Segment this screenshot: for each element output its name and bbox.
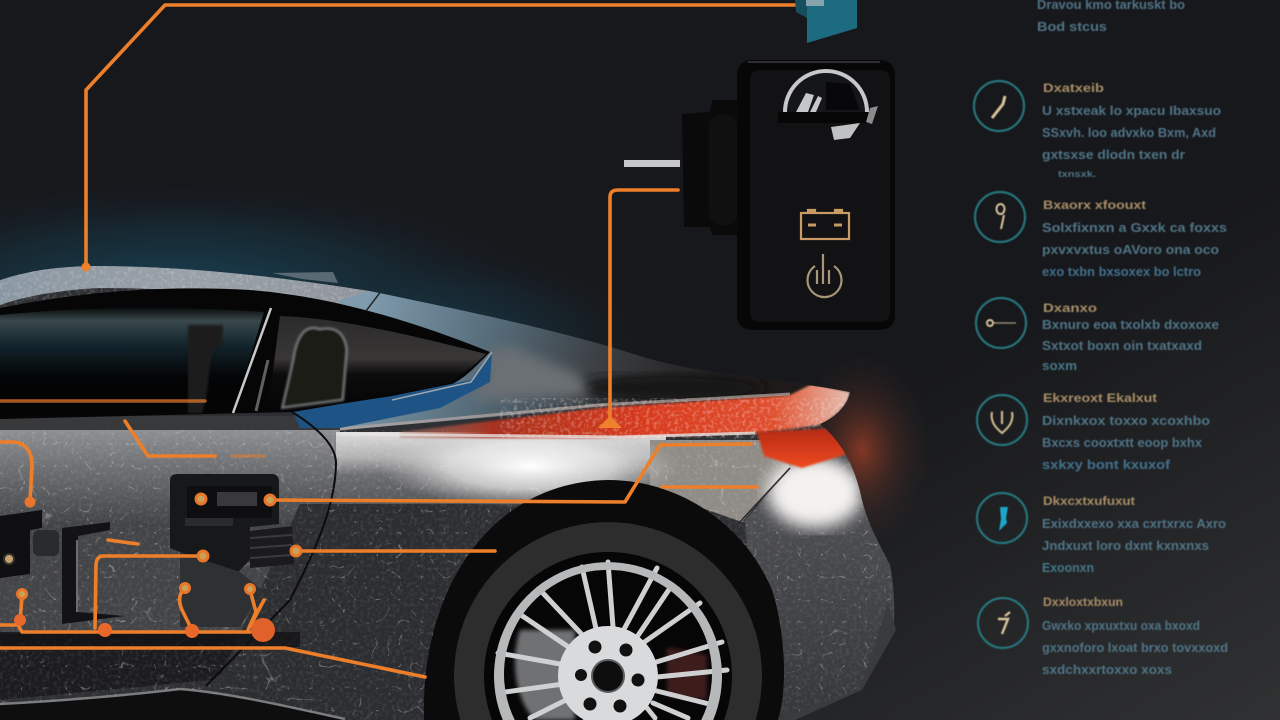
list item 4 (977, 391, 1210, 472)
plug housing (682, 100, 738, 235)
list item 4: Bxcxs cooxtxtt eoop bxhx (1042, 436, 1202, 450)
list item 6 (978, 595, 1228, 677)
wheel arch (424, 480, 784, 720)
upper door wire (125, 421, 215, 456)
dark shoulder (575, 374, 765, 402)
sill wire (0, 648, 425, 677)
tail lamp (757, 428, 850, 468)
icon: fuse (975, 192, 1025, 242)
intro text: Bod stcus (1037, 20, 1107, 34)
gauge (778, 71, 878, 140)
grain on deck (500, 398, 860, 438)
sill (0, 689, 345, 720)
quarter panel seam (738, 468, 790, 524)
wire to quarter (662, 485, 757, 489)
list item 5 (977, 493, 1226, 575)
lower quarter (222, 504, 340, 673)
list item 2: Solxfixnxn a Gxxk ca foxxs (1042, 221, 1227, 235)
list item 1: Dxatxeib (1043, 81, 1104, 95)
front seat (188, 325, 223, 413)
tyre (454, 522, 762, 720)
rear diffuser (775, 602, 896, 720)
rocker shadow (0, 650, 232, 700)
door light band (0, 430, 340, 525)
interior wire (0, 399, 205, 403)
vent block (250, 526, 294, 568)
list item 3: Sxtxot boxn oin txatxaxd (1042, 339, 1202, 353)
list item 1: SSxvh. loo advxko Bxm, Axd (1042, 126, 1216, 140)
door lower panel (0, 525, 300, 633)
nodes (14, 494, 301, 642)
list item 5: Dkxcxtxufuxut (1043, 494, 1135, 508)
list item 4: sxkxy bont kxuxof (1042, 458, 1171, 472)
white tail glare (767, 456, 863, 528)
wire to plug (610, 190, 678, 424)
icon: fuse tool (978, 598, 1028, 648)
metal grain (0, 430, 900, 720)
hub (558, 626, 658, 720)
icon: exhaust (977, 395, 1027, 445)
left loop (0, 442, 32, 502)
wheel (454, 522, 762, 720)
component: charger plug (624, 60, 895, 330)
list item 2: pxvxvxtus oAVoro ona oco (1042, 243, 1219, 257)
list item 1: txnsxk. (1058, 169, 1096, 179)
list item 3 (976, 298, 1219, 373)
roof seam (366, 293, 380, 312)
wire to tail lamp (270, 444, 751, 502)
door upper rail (0, 416, 340, 430)
red deck band (400, 384, 850, 438)
icon: spark plug (974, 81, 1024, 131)
main module (170, 474, 279, 574)
icon: connector (976, 298, 1026, 348)
prong (624, 160, 680, 167)
blue reflection (293, 352, 492, 428)
list item 3: Dxanxo (1043, 301, 1097, 315)
list item 5: Exixdxxexo xxa cxrtxrxc Axro (1042, 517, 1226, 531)
control modules on door (0, 474, 300, 647)
wire to top component (86, 5, 800, 266)
list item 2: exo txbn bxsoxex bo lctro (1042, 265, 1201, 279)
side glass surround (0, 288, 490, 419)
icon: battery (801, 210, 849, 239)
charger body (737, 60, 895, 330)
list item 1: U xstxeak lo xpacu Ibaxsuo (1042, 104, 1221, 118)
list item 1: gxtsxse dlodn txen dr (1042, 148, 1185, 162)
crack texture (0, 430, 900, 720)
wire across door (297, 549, 495, 553)
textured shoulder patch (470, 346, 590, 400)
list item 3: Bxnuro eoa txolxb dxoxoxe (1042, 318, 1219, 332)
deck under line (340, 433, 755, 437)
base paint (0, 260, 900, 720)
quarter glare (390, 438, 670, 506)
rim (494, 562, 722, 720)
icon: power (808, 254, 842, 297)
pillar (233, 308, 271, 413)
left block (0, 510, 42, 578)
list item 3: soxm (1042, 359, 1077, 373)
roof spoiler strip (272, 272, 338, 283)
door seam (206, 412, 336, 686)
list item 2: Bxaorx xfoouxt (1043, 198, 1146, 212)
list item 5: Jndxuxt loro dxnt kxnxnxs (1042, 539, 1209, 553)
list item 5: Exoonxn (1042, 561, 1094, 575)
icon: lightning bolt (977, 493, 1027, 543)
front door glass (0, 308, 264, 370)
brake disc (515, 630, 575, 720)
rear side glass (273, 316, 486, 374)
list item 1 (974, 81, 1221, 179)
quarter rear section (650, 440, 790, 522)
rear side (745, 470, 895, 720)
car body (0, 260, 900, 720)
glass edge highlight (392, 352, 492, 400)
list item 2 (975, 192, 1227, 279)
list item 6: Gwxko xpxuxtxu oxa bxoxd (1042, 619, 1200, 633)
list item 6: gxxnoforo lxoat brxo tovxxoxd (1042, 641, 1228, 655)
list item 4: Ekxreoxt Ekalxut (1043, 391, 1157, 405)
bus wire (0, 625, 250, 632)
wiring harness (0, 5, 800, 677)
lower module plate (180, 552, 262, 627)
list item 6: Dxxloxtxbxun (1043, 595, 1123, 609)
list item 4: Dixnkxox toxxo xcoxhbo (1042, 414, 1210, 428)
component: teal module (795, 0, 857, 43)
rear buttress (340, 291, 850, 430)
left module frame (62, 522, 125, 624)
headrest seat (282, 328, 347, 408)
quarter panel (336, 432, 666, 504)
intro text (1037, 0, 1185, 34)
list item 6: sxdchxxrtoxxo xoxs (1042, 663, 1172, 677)
deck light line (340, 394, 790, 429)
spokes (498, 562, 727, 718)
roof band (0, 266, 370, 305)
